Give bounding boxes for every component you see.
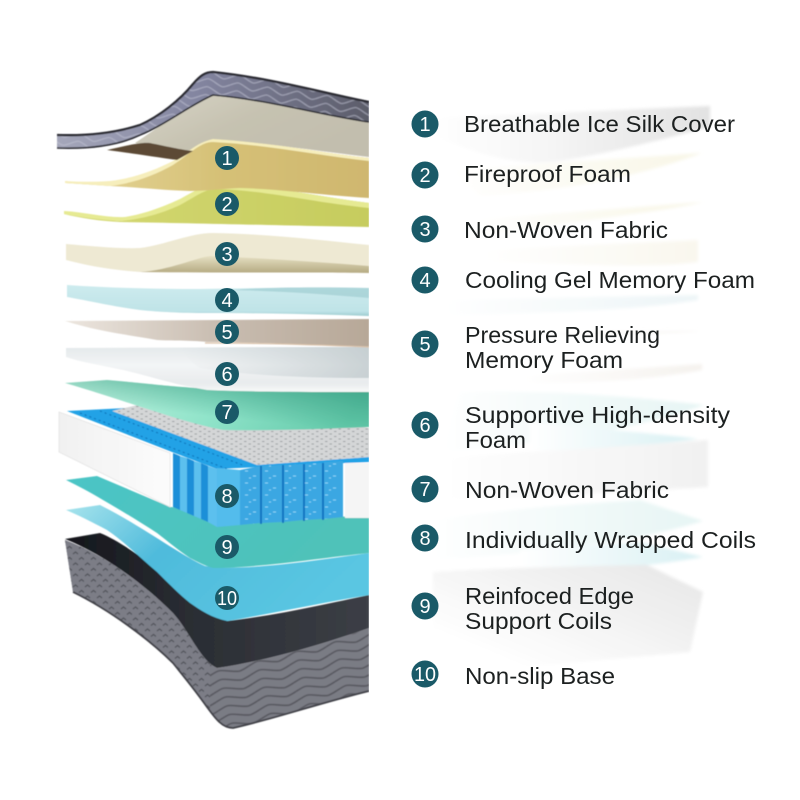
badge 3: 3 (221, 244, 233, 266)
quilted grey top (112, 405, 369, 466)
badge 7: 7 (221, 402, 233, 424)
legend item 5: Pressure Relieving (465, 322, 660, 348)
legend list (412, 110, 756, 689)
badge 6: 6 (221, 364, 233, 386)
layer 2: fireproof foam (64, 184, 369, 227)
legend item 1: Breathable Ice Silk Cover (464, 111, 735, 137)
badge 5: 5 (221, 322, 233, 344)
badge 8: 8 (221, 486, 233, 508)
layer: non-slip base (65, 533, 369, 728)
legend item 10 (412, 660, 615, 689)
coil tops strip (67, 408, 369, 469)
exploded mattress illustration (57, 72, 369, 728)
foam rail left (59, 412, 170, 507)
badge 4 (215, 288, 239, 312)
badge 5 (215, 320, 239, 344)
badge 4: 4 (221, 290, 233, 312)
badge 3 (215, 242, 239, 266)
legend item 2: Fireproof Foam (464, 161, 631, 187)
legend item 6 (412, 402, 731, 453)
legend item 4: Cooling Gel Memory Foam (465, 267, 755, 293)
layer 3: non-woven fabric (66, 233, 369, 273)
legend item 6: 6 (419, 415, 431, 437)
layer 4: cooling gel foam (67, 285, 369, 316)
badge 8 (215, 484, 239, 508)
layer 1: yellow foam (65, 139, 369, 198)
legend item 9: Reinfoced Edge (465, 583, 634, 609)
legend item 5: Memory Foam (465, 347, 623, 373)
legend item 1: 1 (419, 114, 431, 136)
legend item 3: 3 (419, 219, 431, 241)
badge 1: 1 (221, 148, 233, 170)
legend item 9: 9 (419, 596, 431, 618)
legend item 8: Individually Wrapped Coils (465, 527, 756, 553)
badge 7 (215, 400, 239, 424)
legend item 8: 8 (419, 528, 431, 550)
legend item 5 (412, 322, 660, 373)
numbered badges on the layers (215, 146, 239, 610)
legend item 7: Non-Woven Fabric (465, 477, 669, 503)
legend item 3: Non-Woven Fabric (464, 217, 668, 243)
legend item 2 (412, 161, 631, 188)
legend item 10: Non-slip Base (465, 663, 615, 689)
layer 7: non-woven fabric (65, 380, 369, 430)
layer 9: teal edge support (66, 476, 369, 568)
layer 10: blue fabric (66, 505, 369, 621)
legend item 6: Foam (465, 427, 526, 453)
foam rail right (345, 463, 369, 518)
badge 10: 10 (217, 588, 237, 610)
badge 1 (215, 146, 239, 170)
badge 2: 2 (221, 194, 233, 216)
legend item 5: 5 (419, 334, 431, 356)
layer 6: supportive foam (66, 347, 369, 392)
legend item 4: 4 (419, 270, 431, 292)
legend item 9: Support Coils (465, 608, 612, 634)
badge 9 (215, 535, 239, 559)
faded mirrored mattress reflection behind the legend (430, 106, 710, 677)
legend item 9 (412, 583, 634, 634)
legend item 2: 2 (419, 165, 431, 187)
layer 8: individually wrapped coils (59, 395, 369, 527)
badge 2 (215, 192, 239, 216)
legend item 6: Supportive High-density (465, 402, 731, 428)
badge 9: 9 (221, 537, 233, 559)
legend item 7: 7 (419, 479, 431, 501)
coil columns (173, 453, 343, 527)
legend item 10: 10 (414, 664, 436, 686)
layer 5: pressure relieving foam (65, 319, 369, 347)
badge 6 (215, 362, 239, 386)
layer: breathable ice silk cover (57, 72, 369, 160)
